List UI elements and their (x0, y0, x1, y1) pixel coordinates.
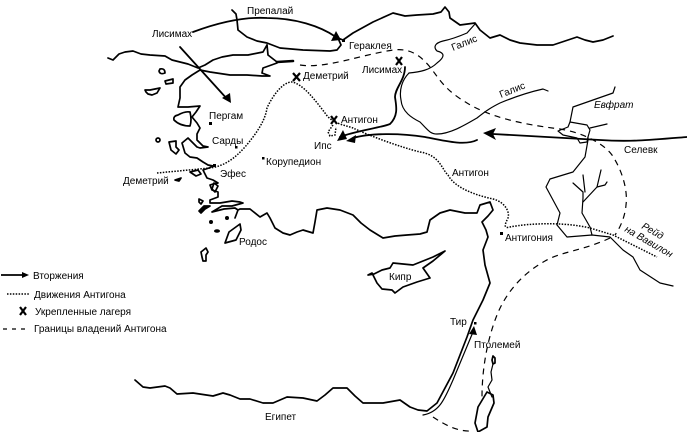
map labels: Рейд (640, 221, 666, 242)
map labels: Антигония (505, 233, 553, 244)
legend item: Antigonus's movements: Движения Антигона (34, 290, 126, 301)
coastlines and islands (108, 7, 613, 411)
legend (1, 271, 167, 335)
map labels: Египет (265, 412, 297, 423)
city dots (209, 39, 503, 324)
map labels: Галис (450, 34, 479, 54)
legend item: invasions: Вторжения (33, 271, 84, 282)
Antigonus's movements (157, 82, 657, 257)
map labels: Пергам (209, 111, 243, 122)
map labels: Антигон (341, 115, 378, 126)
map labels: Галис (498, 81, 527, 101)
rivers: Halys and Euphrates (400, 24, 673, 432)
map labels: Сарды (212, 136, 243, 147)
arrow: Seleucus to Ipsus (346, 134, 477, 143)
arrow: Seleucus (483, 128, 687, 141)
fortified camps (293, 57, 402, 124)
map labels: Деметрий (123, 176, 169, 187)
map labels: Лисимах (362, 65, 402, 76)
map labels: на Вавилон (622, 224, 675, 261)
map labels: Антигон (452, 168, 489, 179)
map labels: Препалай (247, 6, 293, 17)
map labels: Ипс (314, 141, 332, 152)
map labels: Родос (239, 237, 267, 248)
border of Antigonus's possessions (300, 50, 626, 431)
map labels: Деметрий (303, 71, 349, 82)
map labels: Корупедион (266, 157, 321, 168)
map labels: Тир (450, 317, 467, 328)
legend item: borders: Границы владений Антигона (34, 324, 167, 335)
arrow: Lysimachus to Ipsus (337, 67, 405, 141)
map labels: Эфес (220, 168, 246, 180)
invasion arrows (180, 18, 687, 415)
map labels (123, 6, 675, 423)
arrow: Ptolemy (423, 326, 477, 415)
map labels: Птолемей (474, 340, 520, 351)
map labels: Гераклея (349, 41, 392, 52)
legend item: fortified camps: Укрепленные лагеря (35, 307, 131, 318)
arrow: Lysimachus (180, 47, 231, 103)
map labels: Евфрат (594, 99, 633, 111)
map labels: Лисимах (152, 29, 192, 40)
arrow: Prepelaus (193, 18, 341, 41)
map labels: Селевк (624, 145, 658, 156)
legend item: invasions (1, 271, 84, 282)
map labels: Кипр (389, 272, 412, 283)
